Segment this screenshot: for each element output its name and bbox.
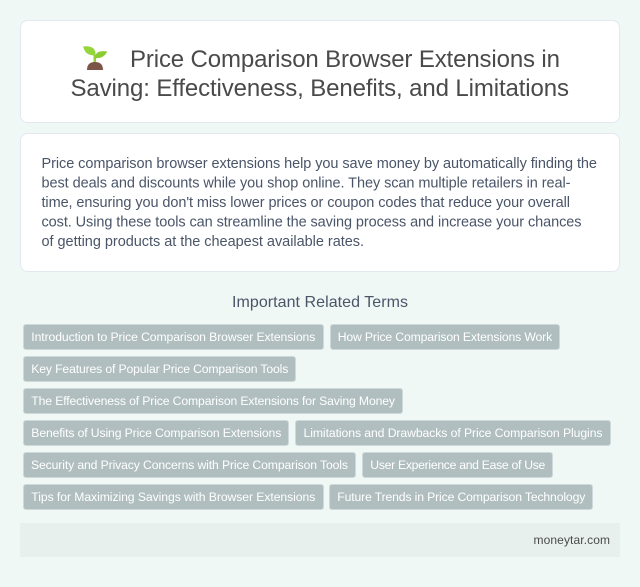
text block: description: cost. Using these tools can streamline the saving process and increase your chances — [42, 214, 582, 230]
tag: Security and Privacy Concerns with Price Comparison Tools — [31, 458, 348, 472]
text block: description: best deals and discounts while you shop online. They scan multiple retailers in real- — [42, 176, 571, 192]
footer: site name: moneytar.com — [534, 533, 610, 547]
tag: User Experience and Ease of Use — [370, 458, 546, 472]
text block: description: time, ensuring you don't miss lower prices or coupon codes that reduce your overall — [42, 195, 570, 211]
icon: sprout emoji — [83, 46, 107, 70]
tag — [24, 420, 288, 446]
tag: Introduction to Price Comparison Browser Extensions — [31, 330, 315, 344]
tag: Benefits of Using Price Comparison Extensions — [31, 426, 281, 440]
tag: The Effectiveness of Price Comparison Extensions for Saving Money — [31, 394, 396, 408]
tag: How Price Comparison Extensions Work — [338, 330, 553, 344]
panel: title card — [20, 20, 620, 122]
tag: Key Features of Popular Price Comparison Tools — [31, 362, 288, 376]
tag: Limitations and Drawbacks of Price Comparison Plugins — [304, 426, 602, 440]
tag — [362, 452, 552, 478]
tag — [24, 484, 324, 510]
tag: Tips for Maximizing Savings with Browser Extensions — [31, 490, 315, 504]
text block: description: of getting products at the cheapest available rates. — [42, 234, 364, 250]
panel: related term tags — [24, 324, 610, 510]
title — [70, 46, 569, 102]
tag: Future Trends in Price Comparison Technology — [337, 490, 586, 504]
tag — [330, 324, 560, 350]
title: Price Comparison Browser Extensions in — [130, 46, 560, 73]
footer — [20, 523, 620, 557]
tag — [24, 452, 356, 478]
text block: description: Price comparison browser extensions help you save money by automatically finding the — [42, 156, 597, 172]
tag — [24, 356, 296, 382]
panel: introduction text — [20, 134, 620, 272]
tag — [296, 420, 610, 446]
heading: related terms: Important Related Terms — [232, 294, 408, 311]
text block: description — [42, 156, 597, 250]
tag — [330, 484, 592, 510]
tag — [24, 388, 402, 414]
title: Saving: Effectiveness, Benefits, and Limitations — [70, 75, 569, 102]
tag — [24, 324, 324, 350]
